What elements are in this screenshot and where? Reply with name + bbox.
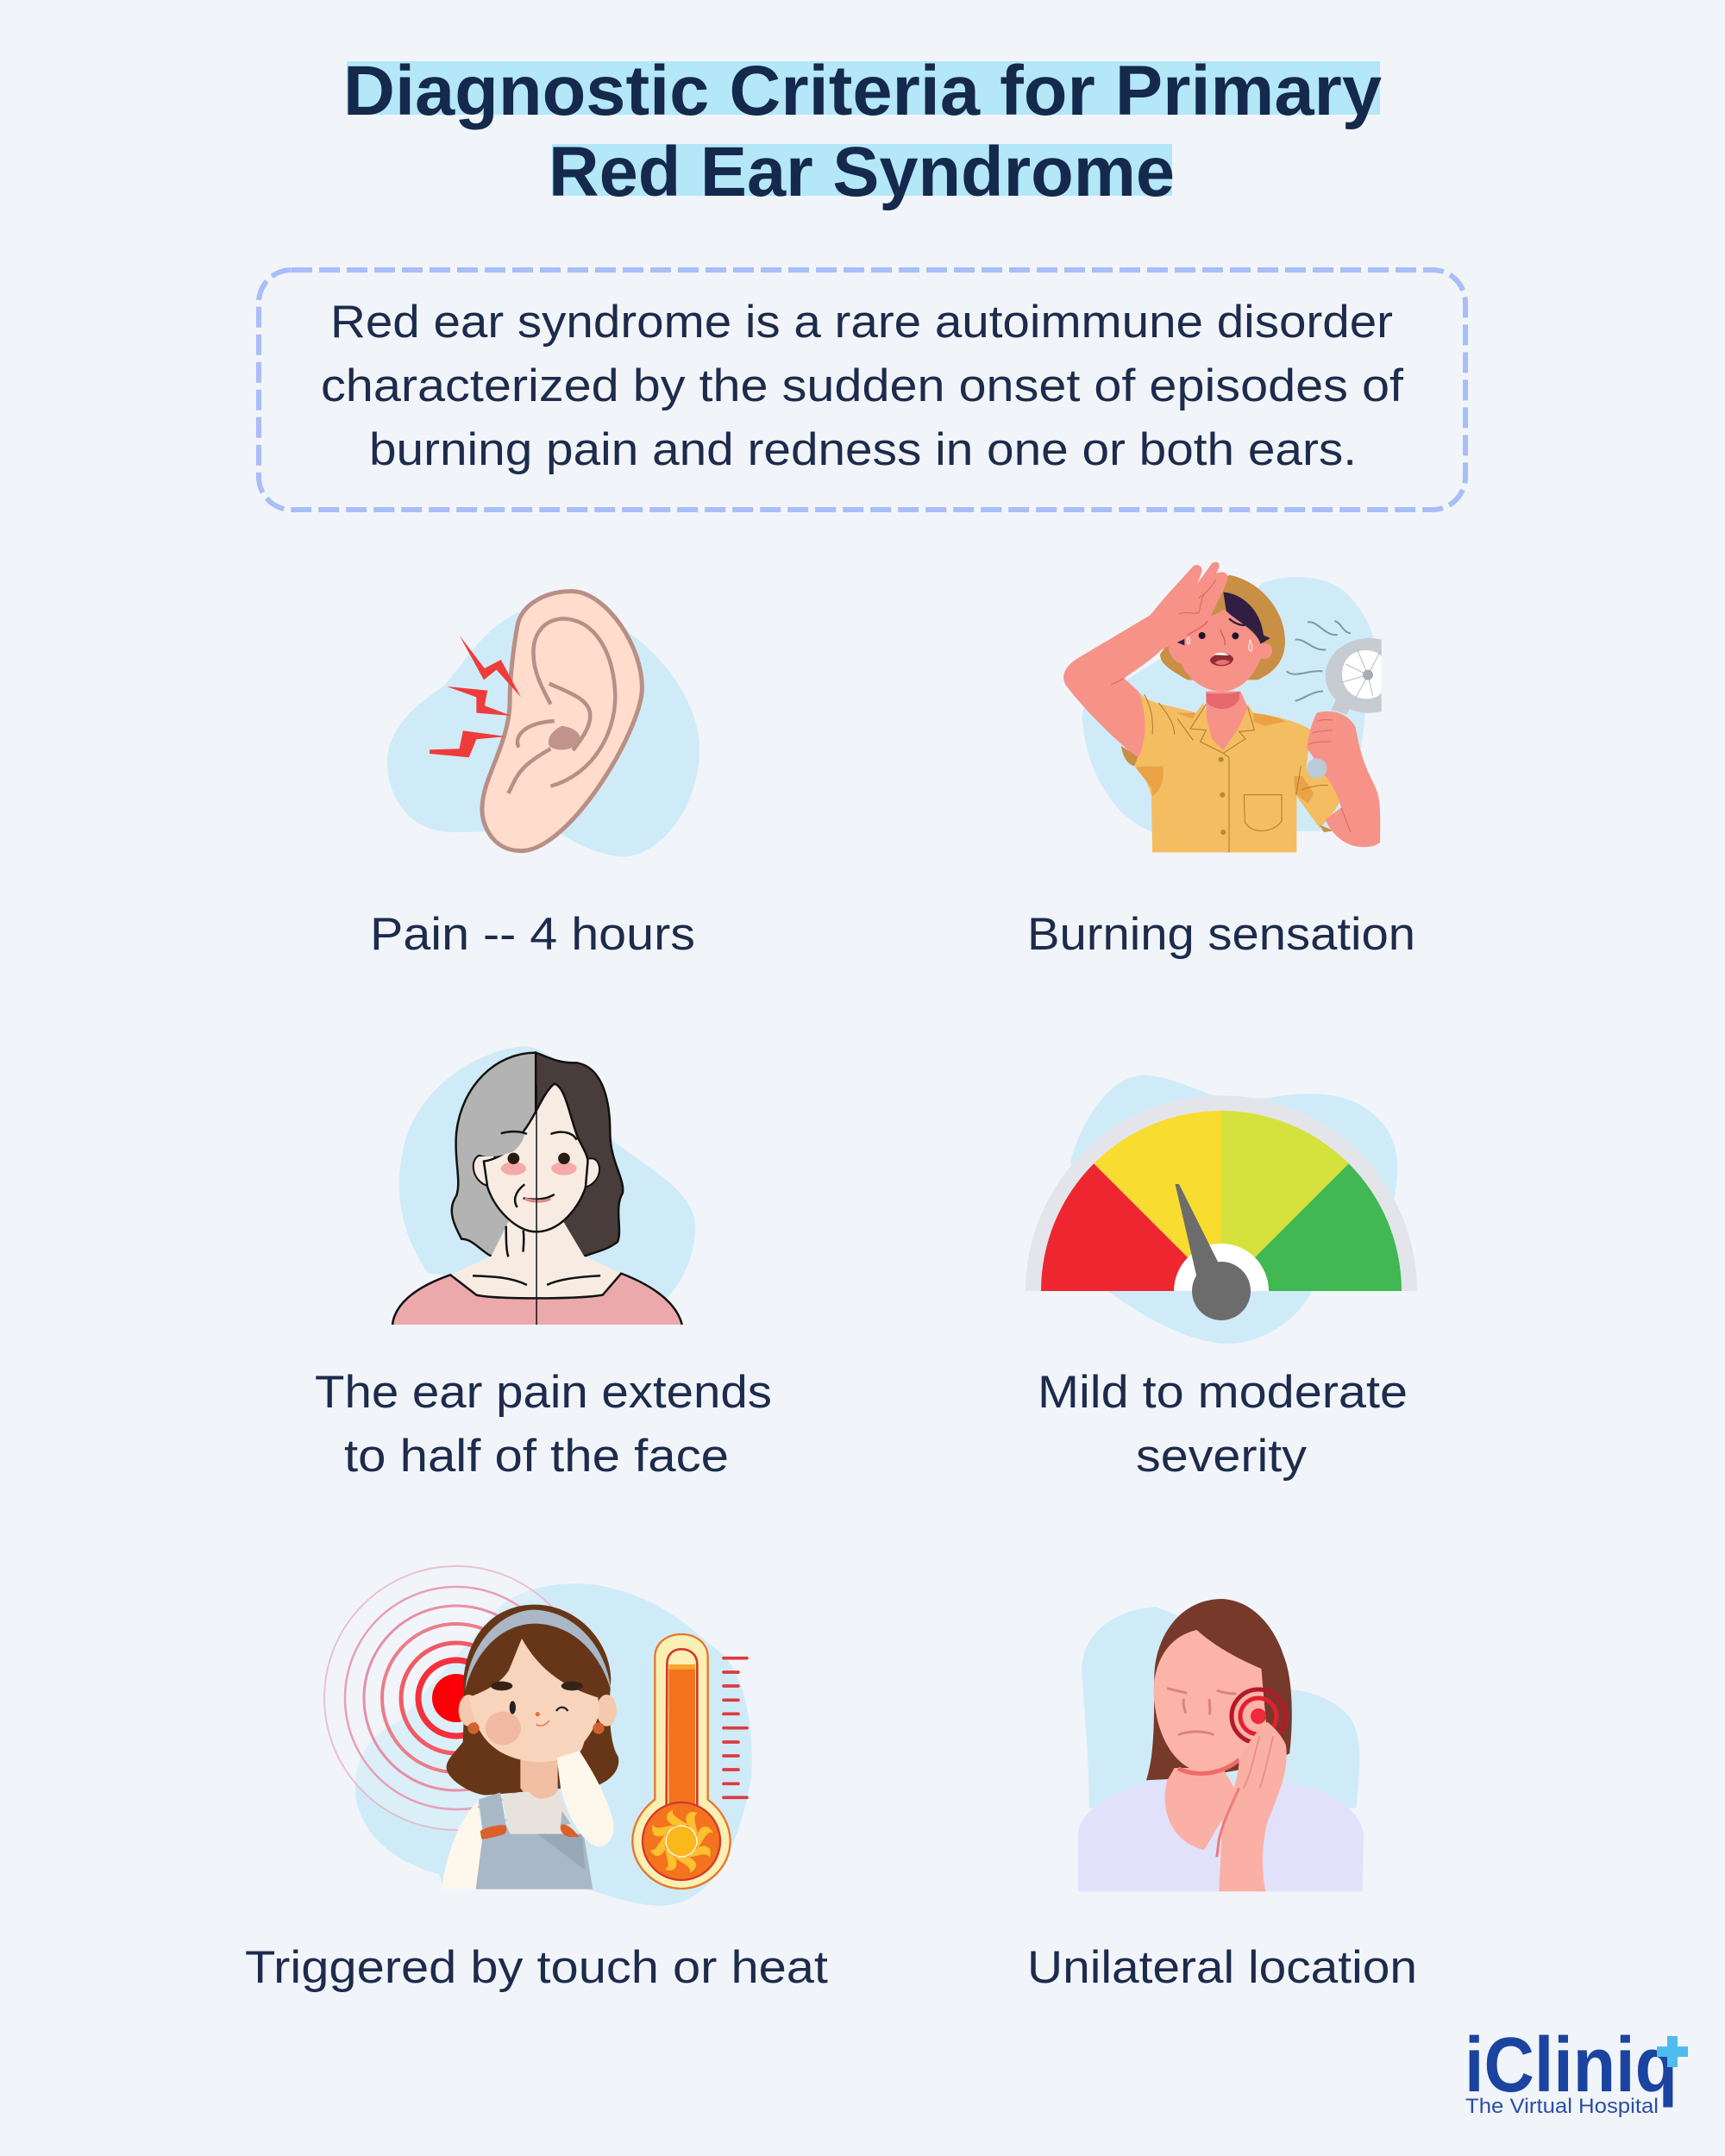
panel: definition callout [259, 270, 1465, 510]
thermometer [632, 1634, 747, 1889]
label: half of face [315, 1367, 772, 1482]
icon: girl with pain rings and thermometer [324, 1566, 752, 1906]
label: trigger: Triggered by touch or heat [245, 1942, 828, 1993]
logo: iCliniq: iCliniq [1465, 2022, 1678, 2109]
panel: definition callout: Red ear syndrome is a rare autoimmune disorder [330, 297, 1393, 348]
label: severity [1038, 1367, 1408, 1482]
label: half of face: The ear pain extends [315, 1367, 772, 1418]
label: pain: Pain -- 4 hours [370, 909, 695, 960]
label: burning: Burning sensation [1027, 909, 1415, 960]
icon: woman with unilateral face pain [1078, 1599, 1364, 1891]
icon: half-aged woman face [392, 1046, 695, 1325]
pain rings [1232, 1689, 1285, 1743]
title [343, 52, 1382, 211]
icon: painful ear [387, 592, 699, 856]
label: half of face: to half of the face [344, 1431, 729, 1482]
label: severity: Mild to moderate [1038, 1367, 1408, 1418]
title: Diagnostic Criteria for Primary [343, 52, 1382, 130]
panel: definition callout: burning pain and redness in one or both ears. [369, 424, 1357, 475]
logo: iCliniq: The Virtual Hospital [1465, 2095, 1659, 2118]
panel: definition callout: characterized by the sudden onset of episodes of [321, 360, 1403, 411]
label: severity: severity [1136, 1431, 1308, 1482]
label: location: Unilateral location [1027, 1942, 1417, 1993]
chart: severity gauge [1026, 1075, 1417, 1344]
icon: man with fan, burning sensation [1063, 562, 1382, 852]
title: Red Ear Syndrome [549, 133, 1175, 211]
